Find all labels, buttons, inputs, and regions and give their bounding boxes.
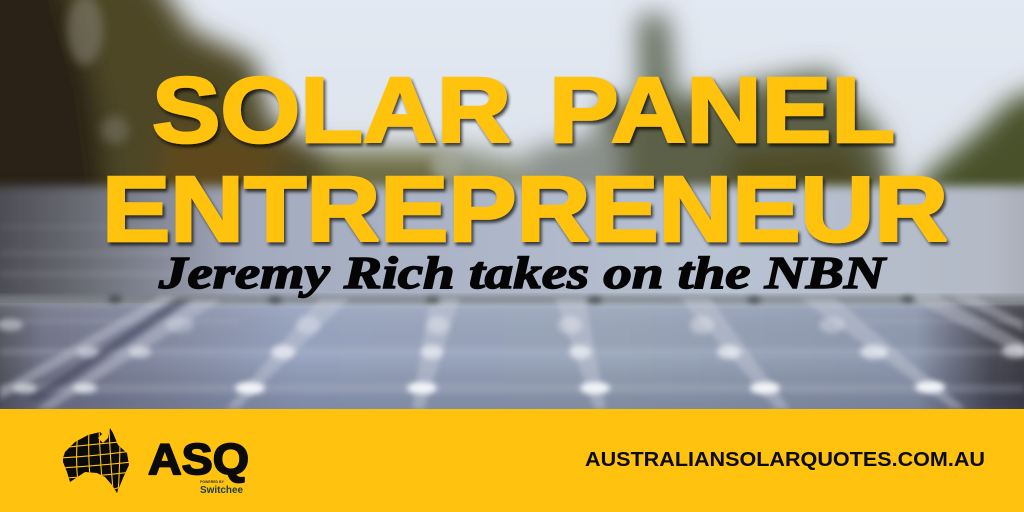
dark diagonal stripe xyxy=(25,300,190,400)
near panel surface xyxy=(0,303,1024,413)
bright grid junctions xyxy=(0,316,1024,394)
title: SOLAR xyxy=(152,58,511,162)
website url: AUSTRALIANSOLARQUOTES.COM.AU xyxy=(585,449,985,471)
footer band xyxy=(0,409,1024,512)
title: PANEL xyxy=(549,58,895,162)
title: ENTREPRENEUR xyxy=(102,157,948,261)
icon: Australia solar grid logo xyxy=(63,428,129,493)
far panel rows xyxy=(0,186,1024,304)
logo sub-brand: powered by Switchee: Switchee xyxy=(200,484,243,496)
subtitle: Jeremy Rich takes on the NBN xyxy=(158,247,887,298)
logo sub-brand: powered by Switchee: POWERED BY xyxy=(200,480,225,484)
frame dark spots xyxy=(108,295,915,304)
panel grid lines xyxy=(0,294,1024,409)
logo wordmark: ASQ: ASQ xyxy=(148,435,249,484)
title xyxy=(102,58,948,261)
panel frame band xyxy=(0,295,1024,304)
horizontal panel lines xyxy=(0,320,1024,393)
blurred trees xyxy=(0,0,1024,194)
